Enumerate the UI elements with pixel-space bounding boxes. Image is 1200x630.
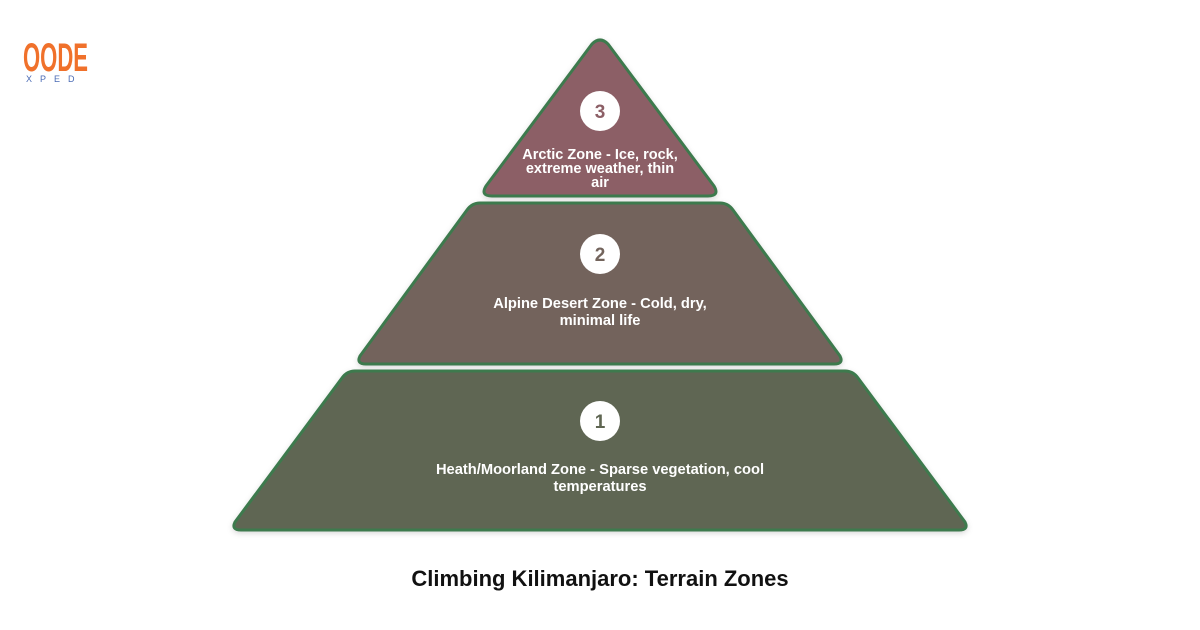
tier 2: alpine desert zone	[359, 203, 841, 364]
tier 2: alpine desert zone: Alpine Desert Zone - Cold, dry,	[493, 296, 707, 312]
tier 3: arctic zone: Arctic Zone - Ice, rock,	[522, 147, 678, 163]
tier 1: heath/moorland zone: Heath/Moorland Zone - Sparse vegetation, cool	[436, 462, 764, 478]
tier 3: arctic zone	[484, 40, 716, 196]
tier 1: heath/moorland zone: 1	[595, 412, 606, 433]
tier 1: heath/moorland zone: temperatures	[553, 479, 647, 495]
title: Climbing Kilimanjaro: Terrain Zones	[411, 566, 789, 591]
logo: OODE	[23, 36, 88, 80]
tier 2: alpine desert zone: 2	[595, 245, 605, 266]
tier 1: heath/moorland zone	[234, 371, 966, 530]
tier 3: arctic zone: air	[591, 175, 609, 191]
tier 3: arctic zone: 3	[595, 102, 605, 123]
tier 3: arctic zone: extreme weather, thin	[526, 161, 674, 177]
tier 2: alpine desert zone: minimal life	[560, 313, 640, 329]
logo	[23, 36, 88, 84]
logo: XPED	[26, 74, 83, 84]
